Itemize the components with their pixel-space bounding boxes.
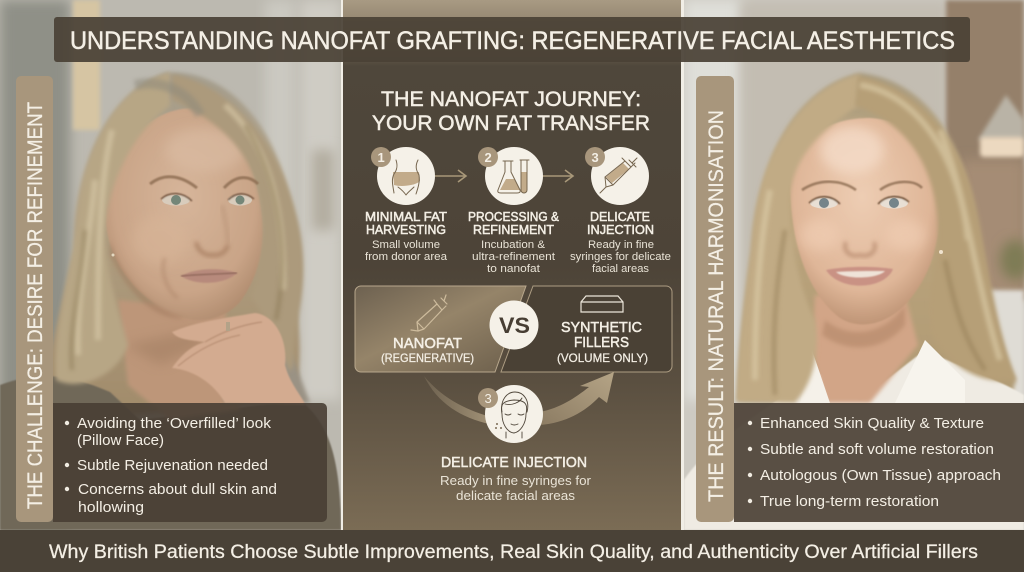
VS badge: VS [499,313,530,338]
step 1: minimal fat harvesting: Small volume [372,239,440,251]
right photo: woman after treatment [684,0,1024,530]
journey heading [372,88,650,135]
left photo: woman considering refinement [0,0,341,530]
right bullet panel: True long-term restoration [760,493,939,510]
step 2: processing and refinement: ultra-refinement [472,251,555,263]
right bullet panel: Autologous (Own Tissue) approach [760,467,1001,484]
left bullet panel [53,403,327,522]
title banner [54,17,970,62]
journey heading: THE NANOFAT JOURNEY: [381,88,641,111]
step 2: processing and refinement: REFINEMENT [473,223,554,237]
delicate injection face icon: 3 [484,391,492,406]
step 3: delicate injection: facial areas [592,263,649,275]
comparison: nanofat: (REGENERATIVE) [381,351,474,365]
left bullet panel: hollowing [78,499,144,516]
delicate injection caption: DELICATE INJECTION [441,454,587,471]
left vertical label [16,76,53,522]
delicate injection caption: Ready in fine syringes for [440,473,592,488]
step 1: minimal fat harvesting: from donor area [365,251,448,263]
comparison: nanofat [355,286,526,372]
comparison: synthetic fillers: FILLERS [574,335,629,351]
comparison: nanofat: NANOFAT [393,336,462,352]
VS badge [490,300,538,350]
center panel background [343,0,681,530]
bottom banner: Why British Patients Choose Subtle Improvements, Real Skin Quality, and Authenticity Over Artificial Fillers [49,541,978,563]
nose and smile [845,242,875,256]
step 1: minimal fat harvesting: HARVESTING [366,223,446,237]
title banner: UNDERSTANDING NANOFAT GRAFTING: REGENERATIVE FACIAL AESTHETICS [70,27,955,55]
step 1: minimal fat harvesting: MINIMAL FAT [365,210,447,224]
left vertical label: THE CHALLENGE: DESIRE FOR REFINEMENT [23,102,47,509]
neck and chest [118,300,226,403]
hand [172,313,305,405]
step 2: processing and refinement: Incubation & [481,239,546,251]
right vertical label [696,76,734,522]
face [790,118,940,324]
step 3: delicate injection: INJECTION [587,223,654,237]
step 2: processing and refinement: 2 [484,150,492,165]
right bullet panel: Subtle and soft volume restoration [760,441,994,458]
comparison: synthetic fillers: SYNTHETIC [561,320,642,336]
delicate injection caption: delicate facial areas [456,488,576,503]
delicate injection caption [440,454,592,503]
step 3: delicate injection: 3 [592,150,599,165]
arrow: step 1 to 2 [435,170,466,182]
neck [812,295,918,403]
hair back [738,73,1016,400]
eyes and brows [802,182,856,190]
left bullet panel: Subtle Rejuvenation needed [77,457,268,474]
eyes and brows [150,177,197,188]
right bullet panel [734,403,1024,522]
right bullet panel: Enhanced Skin Quality & Texture [760,415,984,432]
step 1: minimal fat harvesting [365,147,448,263]
right vertical label: THE RESULT: NATURAL HARMONISATION [704,110,728,502]
delicate injection face icon [478,385,543,443]
hair back [40,73,301,420]
step 3: delicate injection: Ready in fine [588,239,654,251]
step 2: processing and refinement: PROCESSING & [468,210,560,224]
left bullet panel: Avoiding the ‘Overfilled’ look [77,415,272,432]
step 2: processing and refinement: to nanofat [487,263,540,275]
step 1: minimal fat harvesting: 1 [378,150,385,165]
shirt [684,350,1024,530]
bottom banner [0,530,1024,572]
curved arrow from nanofat [424,372,614,425]
comparison: synthetic fillers: (VOLUME ONLY) [557,351,648,365]
face [106,108,263,320]
journey heading: YOUR OWN FAT TRANSFER [372,112,650,135]
left bullet panel: (Pillow Face) [77,432,164,449]
hair front strands [55,72,170,384]
step 3: delicate injection [570,147,671,275]
step 2: processing and refinement [468,147,560,275]
arrow: step 2 to 3 [542,170,573,182]
left bullet panel: Concerns about dull skin and [78,481,277,498]
nose and mouth [196,242,228,255]
comparison: synthetic fillers [501,286,672,372]
hair front strands [736,74,860,403]
sweater [0,376,341,530]
step 3: delicate injection: syringes for delicate [570,251,671,263]
step 3: delicate injection: DELICATE [590,210,650,224]
